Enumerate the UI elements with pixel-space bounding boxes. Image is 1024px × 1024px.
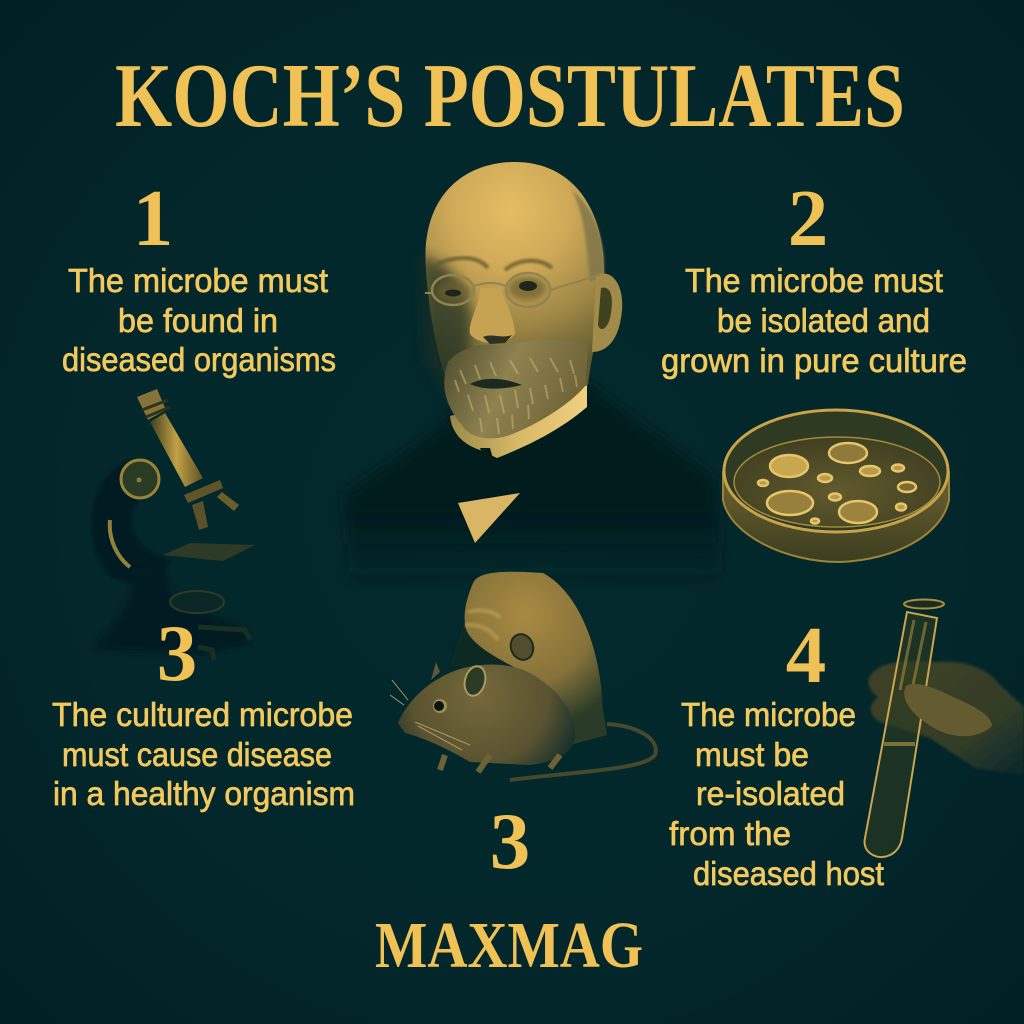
icon: microscope bbox=[90, 389, 255, 660]
tube bbox=[150, 413, 203, 487]
eyes bbox=[445, 281, 537, 296]
icon: laboratory rat bbox=[390, 572, 656, 780]
nose bbox=[470, 288, 515, 343]
postulate 2 text bbox=[661, 262, 967, 379]
icon: hand holding test tube bbox=[865, 600, 1024, 857]
postulate 3 text bbox=[52, 696, 355, 812]
objective lens bbox=[192, 501, 208, 530]
head bbox=[425, 162, 604, 430]
mouth shadow bbox=[470, 379, 522, 389]
legs and feet bbox=[440, 755, 560, 772]
postulate 1 text bbox=[62, 262, 336, 378]
postulate 3 text: in a healthy organism bbox=[53, 775, 355, 812]
eye bbox=[433, 699, 447, 713]
dish wall bbox=[723, 472, 949, 562]
focus wheel bbox=[121, 460, 159, 498]
ear bbox=[592, 273, 622, 352]
postulate 4 text: must be bbox=[695, 736, 809, 773]
postulate 1 text: diseased organisms bbox=[62, 341, 336, 378]
hand back bbox=[868, 661, 1024, 775]
arm shadow bbox=[91, 458, 172, 590]
agar bbox=[734, 437, 940, 527]
glasses bbox=[425, 273, 600, 307]
portrait of Robert Koch bbox=[345, 162, 725, 590]
dark shape behind bbox=[450, 620, 520, 680]
collar gap bbox=[480, 448, 494, 462]
mirror bbox=[170, 591, 224, 613]
postulate 2 text: grown in pure culture bbox=[661, 342, 967, 379]
beard and moustache bbox=[444, 340, 588, 438]
brow furrows bbox=[437, 258, 552, 270]
postulate 4 text: diseased host bbox=[693, 855, 884, 892]
postulate 4 text: from the bbox=[669, 815, 791, 852]
coin-like ear patch bbox=[507, 631, 537, 663]
nostril shadow bbox=[483, 335, 512, 344]
postulate 1 text: be found in bbox=[118, 302, 278, 339]
postulate 4 text: The microbe bbox=[681, 696, 856, 733]
number 3 left: 3 bbox=[157, 608, 197, 698]
nosepiece bbox=[184, 480, 223, 503]
number 4: 4 bbox=[786, 610, 826, 700]
collar rings bbox=[142, 400, 170, 417]
eye sockets bbox=[436, 276, 546, 303]
postulate 3 text: must cause disease bbox=[62, 736, 332, 773]
colonies bbox=[758, 443, 916, 524]
base bbox=[90, 570, 250, 655]
jacket bbox=[345, 385, 725, 590]
thumb bbox=[904, 684, 992, 736]
icon: petri dish bbox=[723, 410, 949, 562]
feet bbox=[198, 627, 250, 660]
test tube bbox=[865, 612, 937, 857]
tube cap bbox=[137, 389, 166, 420]
glass highlights bbox=[900, 620, 926, 690]
number 1: 1 bbox=[133, 173, 173, 263]
body bbox=[398, 665, 575, 765]
stage bbox=[163, 543, 255, 561]
shirt front triangle bbox=[458, 493, 520, 543]
side objective bbox=[217, 492, 239, 511]
gold arm arc bbox=[110, 520, 130, 567]
liquid level bbox=[884, 742, 915, 746]
postulate 3 text: The cultured microbe bbox=[52, 696, 353, 733]
number 3 bottom: 3 bbox=[490, 796, 530, 886]
back ear bbox=[431, 662, 440, 680]
tube rim bbox=[904, 600, 944, 608]
whiskers bbox=[390, 680, 470, 750]
tail bbox=[510, 724, 656, 780]
inner ear bbox=[598, 288, 612, 329]
beard hair strokes bbox=[455, 358, 577, 434]
dish interior bbox=[724, 410, 948, 532]
ear bbox=[461, 664, 489, 698]
cropped hair bbox=[572, 190, 604, 282]
postulate 4 text: re-isolated bbox=[696, 775, 845, 812]
postulate 2 text: be isolated and bbox=[717, 302, 930, 339]
postulate 2 text: The microbe must bbox=[685, 262, 943, 299]
postulate 1 text: The microbe must bbox=[68, 262, 328, 299]
hump fold lines bbox=[465, 610, 500, 640]
brand name: MAXMAG bbox=[375, 909, 643, 982]
number 2: 2 bbox=[788, 173, 828, 263]
shaded left face bbox=[420, 255, 472, 420]
large hump bbox=[465, 572, 607, 745]
collar bbox=[450, 380, 587, 458]
postulate 4 text bbox=[669, 696, 884, 892]
